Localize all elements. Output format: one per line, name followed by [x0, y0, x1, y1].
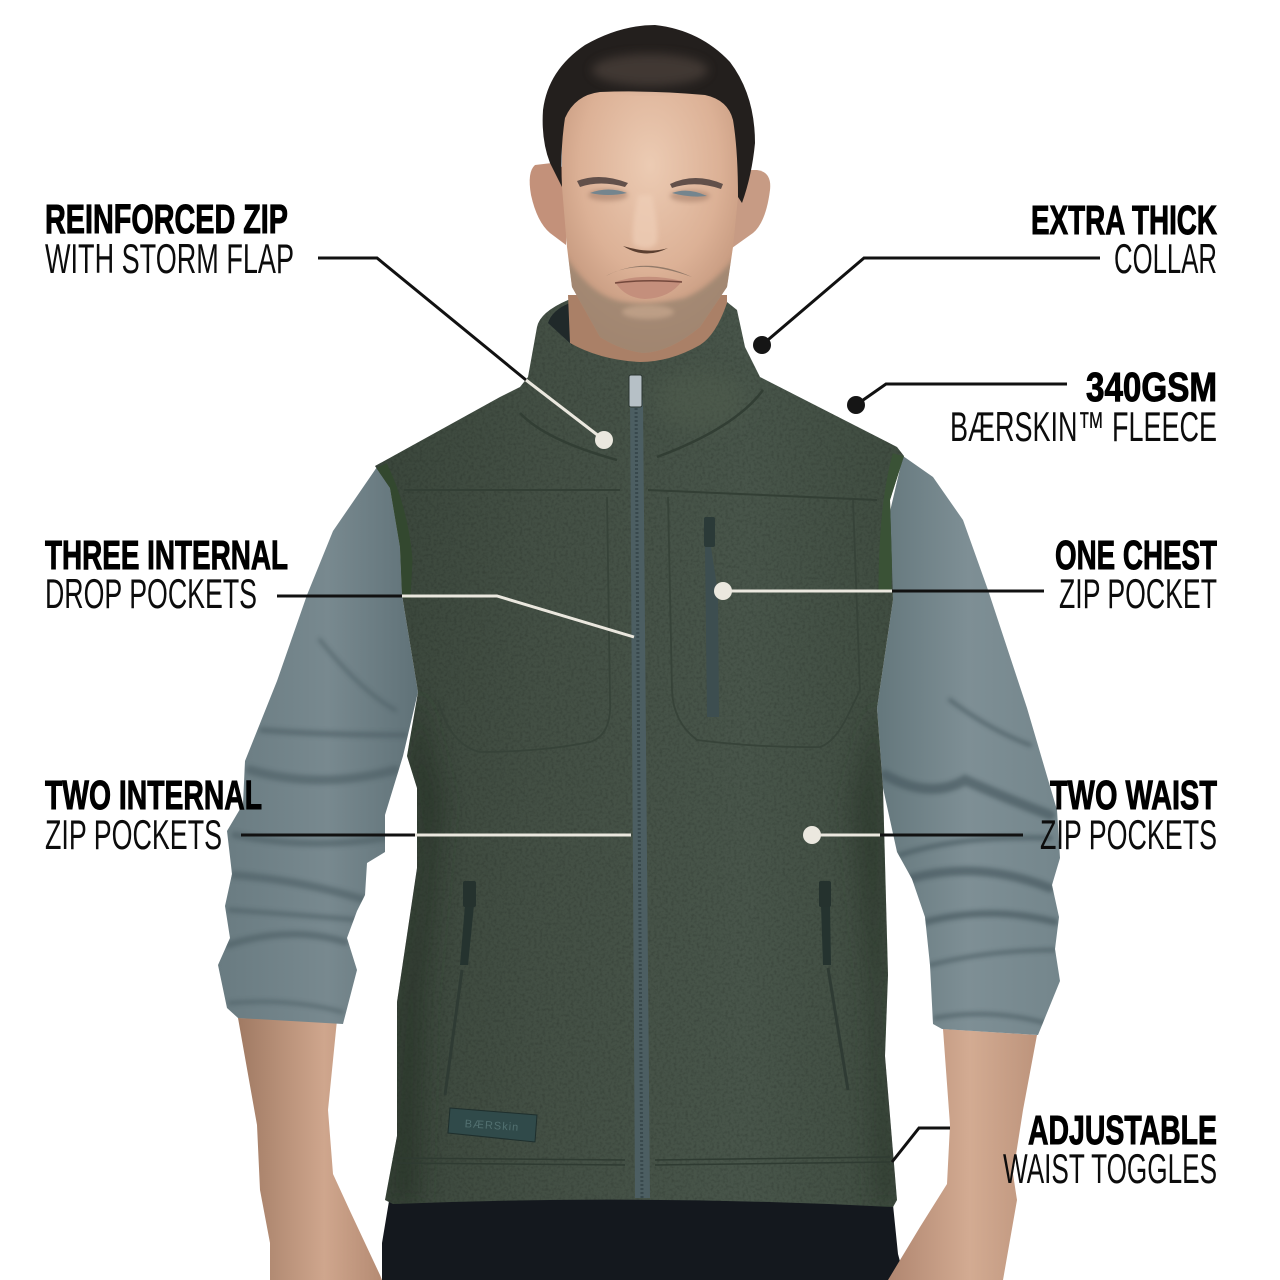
stubble — [568, 258, 731, 353]
callout: three internal drop pockets: DROP POCKETS — [45, 570, 257, 617]
vest body — [370, 295, 910, 1210]
pocket outlines — [438, 497, 610, 752]
yoke seams — [404, 490, 877, 500]
callout: two waist zip pockets — [803, 772, 1217, 858]
callout: adjustable waist toggles — [892, 1107, 1217, 1192]
nose shadow — [623, 246, 668, 254]
hem stitching — [392, 1157, 890, 1165]
callout: reinforced zip: WITH STORM FLAP — [45, 235, 294, 282]
right eye — [672, 191, 707, 197]
callout: two internal zip pockets: TWO INTERNAL — [45, 772, 262, 818]
callout: extra thick collar — [753, 197, 1217, 354]
moustache — [606, 266, 692, 277]
mouth surround light — [622, 305, 674, 319]
left eye — [590, 190, 627, 195]
collar highlight — [675, 389, 718, 415]
callout: 340gsm fleece — [847, 364, 1217, 450]
brand patch: BÆRSkin — [464, 1118, 520, 1134]
figure: man wearing fleece vest — [218, 25, 1060, 1280]
callout: 340gsm fleece: 340GSM — [1086, 364, 1217, 410]
collar inner shadow — [548, 303, 572, 345]
mouth — [615, 277, 682, 299]
neck — [568, 295, 727, 362]
hair — [543, 25, 755, 203]
callout: two internal zip pockets: ZIP POCKETS — [45, 811, 222, 858]
callout: reinforced zip: REINFORCED ZIP — [45, 196, 288, 242]
right forearm and hand — [888, 1029, 1037, 1280]
right eyebrow — [670, 178, 723, 189]
callout: one chest zip pocket — [714, 532, 1217, 617]
callout: two internal zip pockets — [45, 772, 631, 858]
callout: reinforced zip — [45, 196, 613, 449]
right waist zip pocket — [821, 905, 831, 965]
chest zip pocket — [705, 547, 719, 717]
left side shade — [385, 690, 445, 1205]
left ear — [530, 163, 570, 245]
right ear — [732, 170, 770, 248]
collar fold seams — [520, 390, 763, 460]
callout: three internal drop pockets — [45, 532, 634, 637]
left shirt sleeve — [218, 467, 418, 1024]
left eyebrow — [577, 177, 628, 187]
eye shadow — [588, 189, 710, 202]
callout: extra thick collar: COLLAR — [1114, 235, 1217, 282]
left waist zip pocket — [460, 905, 474, 965]
zip pull — [629, 375, 642, 407]
trousers — [382, 1195, 905, 1280]
callout: two waist zip pockets: TWO WAIST — [1050, 772, 1217, 818]
right sleeve folds — [885, 700, 1055, 1023]
callout: three internal drop pockets: THREE INTERNAL — [45, 532, 288, 578]
left forearm and hand — [238, 1018, 382, 1280]
right side shade — [850, 700, 897, 1205]
armhole bindings — [381, 466, 406, 598]
right shirt sleeve — [877, 456, 1060, 1035]
nose highlight — [633, 195, 657, 248]
face — [562, 85, 738, 353]
brand patch — [448, 1108, 537, 1142]
left sleeve folds — [228, 640, 405, 1012]
hair texture — [592, 54, 708, 86]
centre zip — [630, 400, 650, 1198]
